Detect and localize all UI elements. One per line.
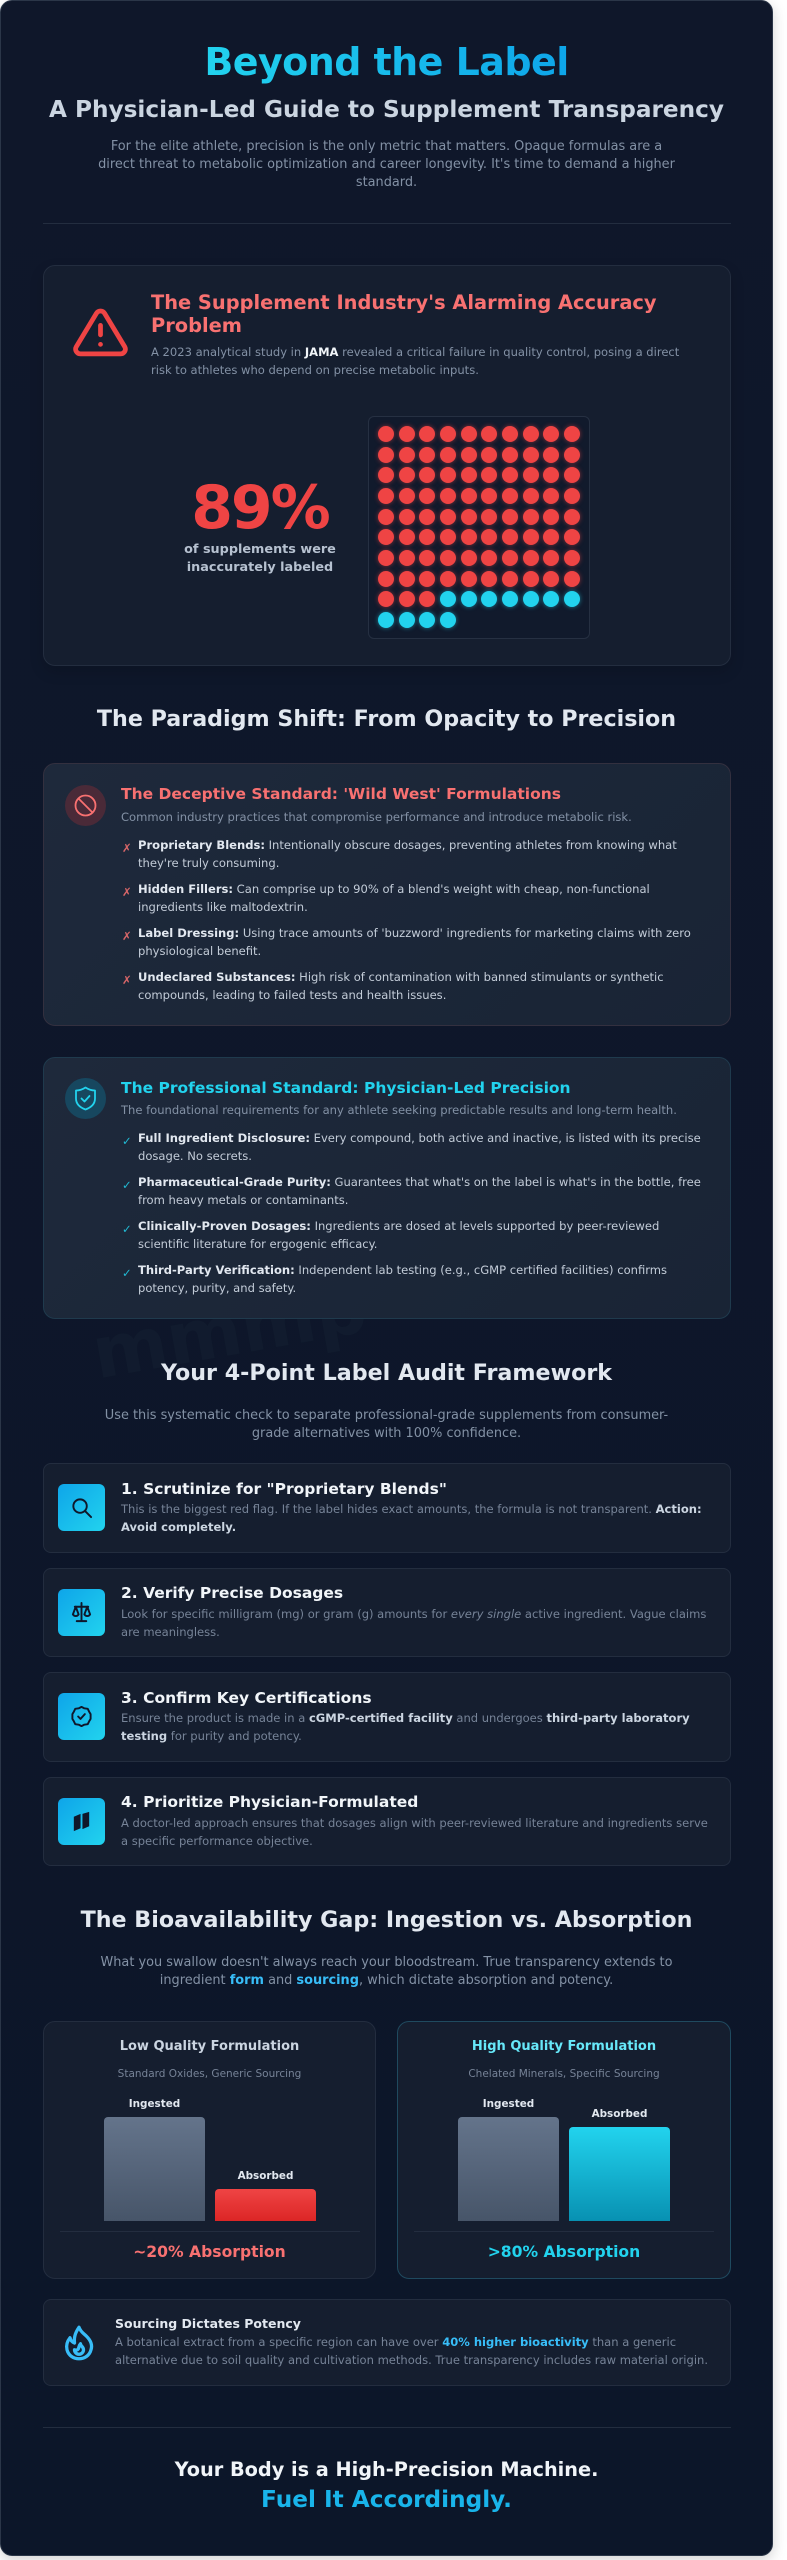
deceptive list xyxy=(122,838,691,1002)
step 4 text: a specific performance objective. xyxy=(121,1834,313,1848)
section heading: bioavailability: The Bioavailability Gap: Ingestion vs. Absorption xyxy=(81,1907,692,1933)
dot grid panel xyxy=(368,416,590,639)
label: ingested: Ingested xyxy=(483,2098,534,2110)
step 1 text xyxy=(121,1502,702,1534)
professional list: ✓ xyxy=(122,1266,132,1280)
statistic caption: of supplements were xyxy=(184,542,336,557)
professional list: Third-Party Verification: Independent lab testing (e.g., cGMP certified facilities) confirms xyxy=(138,1263,667,1277)
statistic caption: inaccurately labeled xyxy=(187,560,333,575)
icon: shield check xyxy=(65,1078,106,1119)
result: low quality: ~20% Absorption xyxy=(133,2243,286,2261)
deceptive list: ✗ xyxy=(122,929,132,943)
step 2 panel xyxy=(43,1568,731,1657)
deceptive list: physiological benefit. xyxy=(138,944,261,958)
step 2 icon xyxy=(58,1589,105,1636)
audit intro xyxy=(105,1408,668,1441)
sourcing text xyxy=(115,2335,708,2367)
step 3 icon xyxy=(58,1693,105,1740)
deceptive list: compounds, leading to failed tests and health issues. xyxy=(138,988,446,1002)
deceptive heading: The Deceptive Standard: 'Wild West' Formulations xyxy=(121,785,561,803)
step 3 text: Ensure the product is made in a cGMP-certified facility and undergoes third-party laboratory xyxy=(121,1711,690,1725)
deceptive list: Undeclared Substances: High risk of contamination with banned stimulants or synthetic xyxy=(138,970,664,984)
bioavailability intro: What you swallow doesn't always reach your bloodstream. True transparency extends to xyxy=(100,1955,672,1970)
step 1 text: This is the biggest red flag. If the label hides exact amounts, the formula is not transparent. Action: xyxy=(121,1502,702,1516)
step 3 text: testing for purity and potency. xyxy=(121,1729,302,1743)
icon: flame xyxy=(65,2326,94,2360)
audit intro: grade alternatives with 100% confidence. xyxy=(252,1426,521,1441)
step 3 text xyxy=(121,1711,690,1743)
deceptive list: ✗ xyxy=(122,973,132,987)
low quality title: Low Quality Formulation xyxy=(120,2039,299,2054)
dot grid xyxy=(375,423,583,631)
deceptive list: ✗ xyxy=(122,885,132,899)
statistic: 89%: 89% xyxy=(191,473,329,543)
step 2 text: are meaningless. xyxy=(121,1625,220,1639)
panel: high quality xyxy=(397,2021,731,2279)
deceptive subtitle: Common industry practices that compromise performance and introduce metabolic risk. xyxy=(121,810,632,824)
step 4 title: 4. Prioritize Physician-Formulated xyxy=(121,1793,418,1811)
panel text: risk to athletes who depend on precise metabolic inputs. xyxy=(151,363,479,377)
deceptive list: Proprietary Blends: Intentionally obscure dosages, preventing athletes from knowing what xyxy=(138,838,677,852)
deceptive list: they're truly consuming. xyxy=(138,856,279,870)
step 1 panel xyxy=(43,1463,731,1553)
bar: ingested xyxy=(458,2117,559,2221)
intro text: For the elite athlete, precision is the only metric that matters. Opaque formulas are a xyxy=(111,139,662,154)
professional list: ✓ xyxy=(122,1178,132,1192)
icon: prohibited xyxy=(65,785,106,826)
section heading: paradigm shift: The Paradigm Shift: From Opacity to Precision xyxy=(97,706,676,732)
panel: professional standard xyxy=(43,1057,731,1319)
result: high quality: >80% Absorption xyxy=(488,2243,640,2261)
panel: sourcing xyxy=(43,2299,731,2386)
sourcing title: Sourcing Dictates Potency xyxy=(115,2316,301,2331)
step 4 panel xyxy=(43,1777,731,1866)
deceptive list: Label Dressing: Using trace amounts of 'buzzword' ingredients for marketing claims with zero xyxy=(138,926,691,940)
panel text: A 2023 analytical study in JAMA revealed a critical failure in quality control, posing a direct xyxy=(151,345,679,359)
audit intro: Use this systematic check to separate professional-grade supplements from consumer- xyxy=(105,1408,668,1423)
bioavailability intro xyxy=(100,1955,672,1988)
step 3 title: 3. Confirm Key Certifications xyxy=(121,1689,372,1707)
professional list: dosage. No secrets. xyxy=(138,1149,252,1163)
intro text: standard. xyxy=(356,175,417,190)
step 4 icon xyxy=(58,1798,105,1845)
panel heading: The Supplement Industry's Alarming Accuracy xyxy=(151,291,657,314)
deceptive list: Hidden Fillers: Can comprise up to 90% of a blend's weight with cheap, non-functional xyxy=(138,882,650,896)
closing call to action: Fuel It Accordingly. xyxy=(261,2486,512,2513)
closing line: Your Body is a High-Precision Machine. xyxy=(175,2458,598,2481)
professional list: potency, purity, and safety. xyxy=(138,1281,296,1295)
panel: low quality xyxy=(43,2021,376,2279)
title: Beyond the Label xyxy=(204,40,569,84)
step 2 text: Look for specific milligram (mg) or gram (g) amounts for every single active ingredient. Vague claims xyxy=(121,1607,706,1621)
step 1 icon xyxy=(58,1484,105,1531)
step 3 panel xyxy=(43,1672,731,1762)
step 1 text: Avoid completely. xyxy=(121,1520,236,1534)
professional list: Pharmaceutical-Grade Purity: Guarantees that what's on the label is what's in the bottle, free xyxy=(138,1175,701,1189)
step 4 text: A doctor-led approach ensures that dosages align with peer-reviewed literature and ingredients serve xyxy=(121,1816,708,1830)
low quality subtitle: Standard Oxides, Generic Sourcing xyxy=(118,2068,301,2080)
statistic caption xyxy=(184,542,336,575)
panel: accuracy problem xyxy=(43,265,731,666)
professional list: from heavy metals or contaminants. xyxy=(138,1193,348,1207)
professional subtitle: The foundational requirements for any athlete seeking predictable results and long-term health. xyxy=(121,1103,677,1117)
step 1 title: 1. Scrutinize for "Proprietary Blends" xyxy=(121,1480,447,1498)
deceptive list: ingredients like maltodextrin. xyxy=(138,900,308,914)
label: ingested: Ingested xyxy=(129,2098,180,2110)
deceptive list: ✗ xyxy=(122,841,132,855)
bar: absorbed xyxy=(569,2127,670,2221)
professional heading: The Professional Standard: Physician-Led Precision xyxy=(121,1079,571,1097)
step 2 text xyxy=(121,1607,706,1639)
professional list: Full Ingredient Disclosure: Every compound, both active and inactive, is listed with its precise xyxy=(138,1131,701,1145)
bioavailability intro: ingredient form and sourcing, which dictate absorption and potency. xyxy=(160,1973,613,1988)
sourcing text: alternative due to soil quality and cultivation methods. True transparency includes raw material origin. xyxy=(115,2353,708,2367)
section heading: audit framework: Your 4-Point Label Audit Framework xyxy=(161,1360,612,1386)
panel: deceptive standard xyxy=(43,763,731,1026)
step 4 text xyxy=(121,1816,708,1848)
high quality title: High Quality Formulation xyxy=(472,2039,656,2054)
bar: absorbed xyxy=(215,2189,316,2221)
professional list xyxy=(122,1131,701,1295)
bar: ingested xyxy=(104,2117,205,2221)
watermark: mmmp xyxy=(86,1265,373,1395)
panel heading: Problem xyxy=(151,314,242,337)
professional list: Clinically-Proven Dosages: Ingredients are dosed at levels supported by peer-reviewed xyxy=(138,1219,659,1233)
label: absorbed: Absorbed xyxy=(238,2170,293,2182)
professional list: ✓ xyxy=(122,1222,132,1236)
professional list: ✓ xyxy=(122,1134,132,1148)
professional list: scientific literature for ergogenic efficacy. xyxy=(138,1237,377,1251)
step 2 title: 2. Verify Precise Dosages xyxy=(121,1584,343,1602)
intro text: direct threat to metabolic optimization and career longevity. It's time to demand a higher xyxy=(98,157,675,172)
sourcing text: A botanical extract from a specific region can have over 40% higher bioactivity than a generic xyxy=(115,2335,676,2349)
icon: warning triangle xyxy=(73,308,128,356)
panel text xyxy=(151,345,679,377)
subtitle: A Physician-Led Guide to Supplement Transparency xyxy=(49,96,724,123)
intro text xyxy=(98,139,675,190)
panel heading xyxy=(151,291,657,337)
label: absorbed: Absorbed xyxy=(592,2108,647,2120)
high quality subtitle: Chelated Minerals, Specific Sourcing xyxy=(468,2068,660,2080)
